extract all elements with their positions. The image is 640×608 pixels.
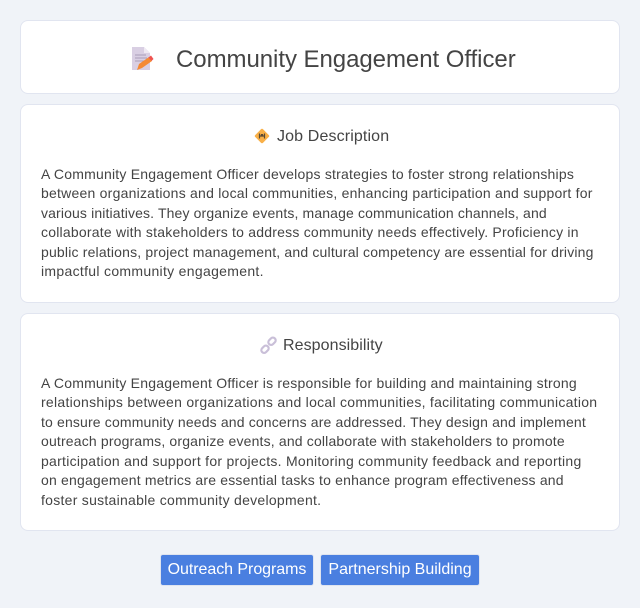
text: responsibility: foster sustainable community development. xyxy=(41,492,321,508)
text: job description: public relations, project management, and cultural competency are essential for driving xyxy=(41,244,594,260)
heading: job description: Job Description xyxy=(277,128,389,145)
text: job description: between organizations and local communities, enhancing participation and support for xyxy=(41,185,593,201)
text: job description: A Community Engagement Officer develops strategies to foster strong relationships xyxy=(41,166,574,182)
title: Community Engagement Officer xyxy=(176,46,516,72)
icon: document with pencil xyxy=(132,47,154,70)
text: job description xyxy=(41,166,594,279)
text: responsibility xyxy=(41,374,597,508)
icon: road sign xyxy=(254,128,270,144)
panel: responsibility xyxy=(20,313,620,531)
text: job description: impactful community engagement. xyxy=(41,263,264,279)
text: responsibility: A Community Engagement Officer is responsible for building and maintaining strong xyxy=(41,374,577,390)
tag: outreach programs xyxy=(160,554,314,586)
panel: job description xyxy=(20,104,620,303)
text: responsibility: on engagement metrics are essential tasks to enhance program effectiveness and xyxy=(41,472,564,488)
text: job description: various initiatives. They organize events, manage communication channels, and xyxy=(41,204,547,220)
heading: responsibility: Responsibility xyxy=(283,337,383,354)
text: job description: collaborate with stakeholders to address community needs effectively. Proficiency in xyxy=(41,224,579,240)
panel: header xyxy=(20,20,620,94)
text: responsibility: to ensure community needs and concerns are addressed. They design and implement xyxy=(41,414,586,430)
text: responsibility: relationships between organizations and local communities, facilitating communication xyxy=(41,394,597,410)
tag: partnership building: Partnership Building xyxy=(328,561,472,578)
text: responsibility: participation and support for projects. Monitoring community feedback and reporting xyxy=(41,452,582,468)
text: responsibility: outreach programs, organize events, and collaborate with stakeholders to promote xyxy=(41,433,565,449)
icon: chain link xyxy=(260,336,277,354)
tag: partnership building xyxy=(320,554,480,586)
tag: outreach programs: Outreach Programs xyxy=(168,561,306,578)
